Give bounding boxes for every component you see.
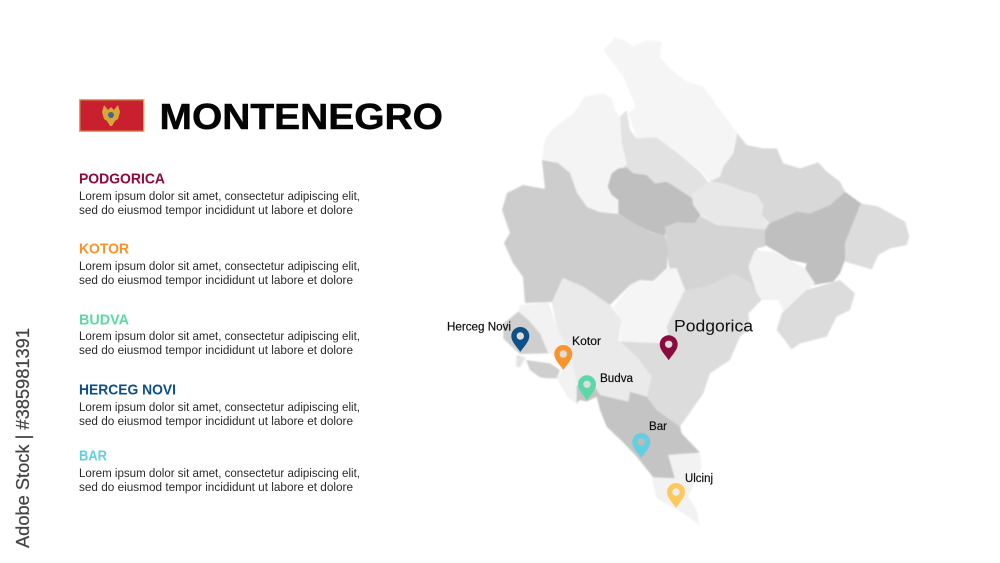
region: light centre	[692, 182, 769, 229]
pin: Ulcinj	[667, 483, 685, 508]
label: Bar: Bar	[649, 421, 667, 433]
text block: Budva: sed do eiusmod tempor incididunt ut labore et dolore	[79, 343, 353, 357]
flag of Montenegro	[80, 100, 144, 131]
text block: Podgorica: Lorem ipsum dolor sit amet, consectetur adipiscing elit,	[79, 189, 360, 203]
text block: Budva: BUDVA	[79, 312, 129, 328]
region: Bar	[577, 385, 700, 478]
northern regions	[542, 37, 909, 297]
title: MONTENEGRO	[160, 96, 443, 137]
text block: Herceg Novi	[79, 382, 360, 428]
region: north west	[542, 93, 627, 214]
text block: Kotor: sed do eiusmod tempor incididunt ut labore et dolore	[79, 273, 353, 287]
region: Herceg Novi	[503, 312, 548, 354]
region: small light east	[748, 250, 815, 312]
text block: Bar	[79, 448, 360, 494]
region: Ulcinj	[652, 453, 702, 525]
pin: Podgorica	[660, 335, 678, 360]
southern regions	[503, 250, 855, 525]
region: coastal strip	[518, 303, 577, 403]
text block: Podgorica: sed do eiusmod tempor incididunt ut labore et dolore	[79, 203, 353, 217]
pin: Budva	[578, 375, 596, 400]
text block: Budva: Lorem ipsum dolor sit amet, consectetur adipiscing elit,	[79, 329, 360, 343]
west region	[502, 160, 668, 305]
text block: Bar: BAR	[79, 448, 107, 464]
region: dark central north	[608, 167, 701, 236]
label: Kotor: Kotor	[572, 336, 601, 348]
region: white centre south	[613, 268, 685, 343]
text block: Bar: sed do eiusmod tempor incididunt ut labore et dolore	[79, 480, 353, 494]
text block: Herceg Novi: HERCEG NOVI	[79, 382, 176, 398]
text block: Herceg Novi: Lorem ipsum dolor sit amet, consectetur adipiscing elit,	[79, 400, 360, 414]
region: far north	[603, 37, 737, 182]
region: north east	[710, 133, 845, 223]
text block: Podgorica: PODGORICA	[79, 170, 165, 188]
label: Podgorica: Podgorica	[674, 318, 754, 336]
pin: Bar	[632, 433, 650, 458]
text block: Kotor: KOTOR	[79, 240, 129, 258]
region: dark east	[765, 192, 861, 285]
label: Herceg Novi: Herceg Novi	[447, 322, 511, 334]
region: far east	[845, 203, 909, 269]
region: north central	[620, 110, 709, 198]
region: Cetinje	[552, 278, 652, 402]
text block: Podgorica	[79, 170, 360, 217]
region: Lustica peninsula	[526, 360, 560, 378]
stock credit strip: Adobe Stock | #385981391	[13, 328, 33, 548]
text block: Kotor: Lorem ipsum dolor sit amet, consectetur adipiscing elit,	[79, 259, 360, 273]
region: south east	[777, 280, 855, 349]
pin: Herceg Novi	[511, 327, 529, 352]
map of Montenegro	[502, 37, 909, 525]
text block: Herceg Novi: sed do eiusmod tempor incididunt ut labore et dolore	[79, 414, 353, 428]
text block: Bar: Lorem ipsum dolor sit amet, consectetur adipiscing elit,	[79, 466, 360, 480]
label: Ulcinj: Ulcinj	[685, 473, 713, 485]
icon: double-headed eagle	[102, 105, 120, 126]
text block: Kotor	[79, 240, 360, 287]
region: central	[665, 216, 765, 297]
text block: Budva	[79, 312, 360, 357]
region: Herceg Novi tip	[516, 355, 526, 367]
pin: Kotor	[554, 345, 572, 370]
region: Podgorica	[613, 273, 762, 427]
label: Budva: Budva	[600, 373, 634, 385]
